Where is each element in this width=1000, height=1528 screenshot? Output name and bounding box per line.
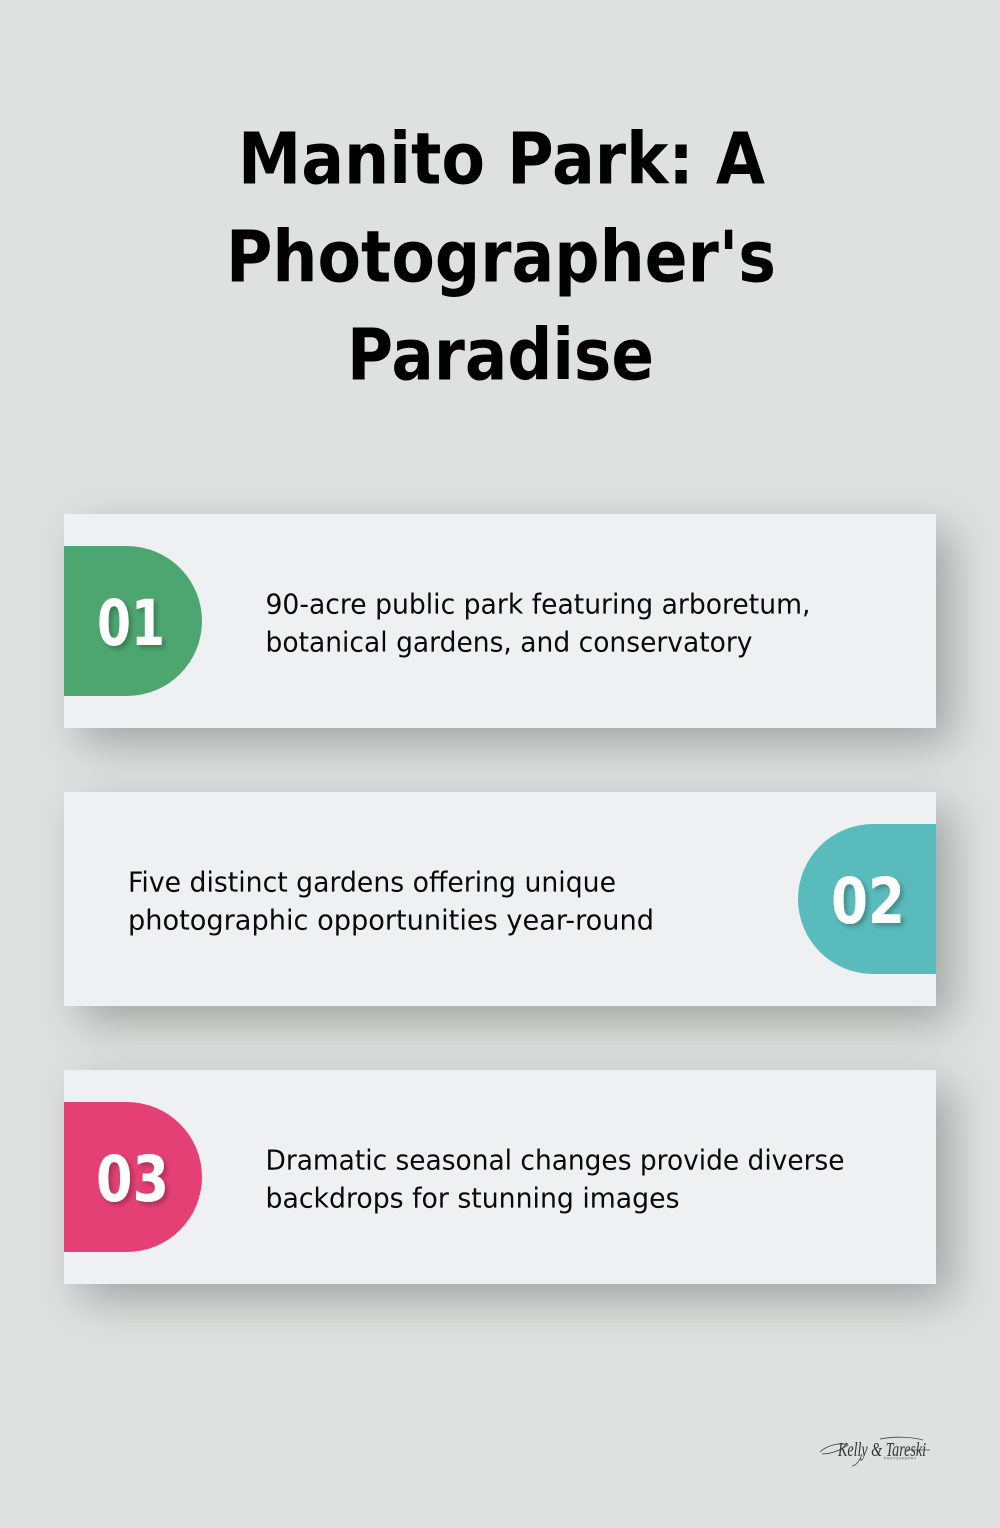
title: Manito Park: A bbox=[238, 118, 765, 200]
text: step 03 description: backdrops for stunning images bbox=[266, 1182, 680, 1214]
badge 03: 03 bbox=[96, 1143, 169, 1216]
text: step 03 description: Dramatic seasonal changes provide diverse bbox=[266, 1144, 844, 1176]
panel: step 03 bbox=[64, 1070, 936, 1284]
panel: step 02 bbox=[64, 792, 936, 1006]
badge 02 bbox=[798, 824, 936, 974]
card background 01 bbox=[64, 514, 936, 728]
text: step 02 description: photographic opportunities year-round bbox=[128, 904, 654, 936]
card background 03 bbox=[64, 1070, 936, 1284]
title: Paradise bbox=[347, 314, 654, 396]
text: step 02 description: Five distinct gardens offering unique bbox=[128, 866, 616, 898]
title: Photographer's bbox=[226, 216, 776, 298]
card background 02 bbox=[64, 792, 936, 1006]
badge 01 bbox=[64, 546, 202, 696]
text: step 01 description: 90-acre public park featuring arboretum, bbox=[266, 588, 810, 620]
text: step 02 description bbox=[128, 866, 654, 936]
badge 03 bbox=[64, 1102, 202, 1252]
signature logo: PHOTOGRAPHY bbox=[884, 1456, 917, 1460]
text: step 01 description bbox=[266, 588, 810, 658]
title bbox=[226, 118, 776, 396]
badge 01: 01 bbox=[97, 587, 165, 660]
signature logo: Kelly & Tareski bbox=[837, 1439, 926, 1461]
signature logo bbox=[820, 1437, 930, 1466]
text: step 03 description bbox=[266, 1144, 844, 1214]
panel: step 01 bbox=[64, 514, 936, 728]
text: step 01 description: botanical gardens, and conservatory bbox=[266, 626, 752, 658]
badge 02: 02 bbox=[831, 865, 905, 938]
